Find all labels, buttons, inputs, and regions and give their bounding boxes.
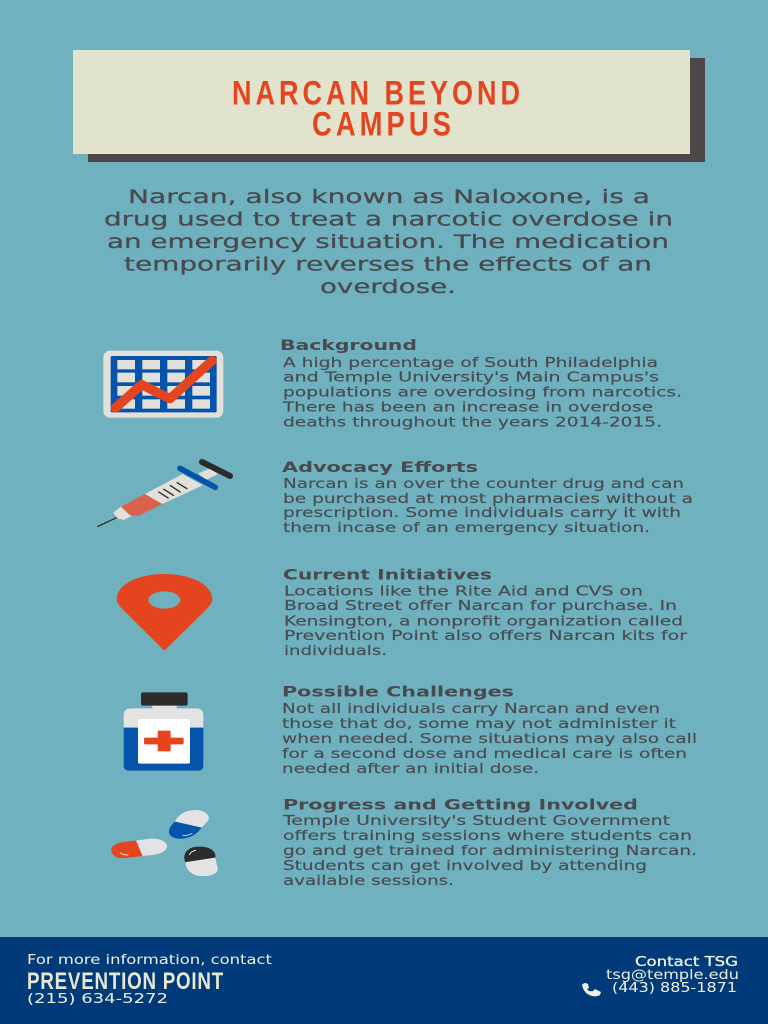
- title banner: [73, 50, 705, 162]
- footer band: [0, 937, 768, 1024]
- section: possible challenges: for a second dose and medical care is often: [282, 747, 687, 762]
- section: current initiatives: Locations like the Rite Aid and CVS on: [284, 584, 643, 600]
- section: advocacy efforts: [282, 460, 693, 536]
- section: possible challenges: those that do, some may not administer it: [282, 717, 676, 732]
- section: background: and Temple University's Main Campus's: [283, 370, 659, 386]
- intro text: temporarily reverses the effects of an: [124, 254, 652, 276]
- icon: syringe: [97, 462, 230, 527]
- title: NARCAN BEYOND: [232, 74, 524, 112]
- section: possible challenges: needed after an initial dose.: [282, 762, 539, 777]
- section: advocacy efforts: prescription. Some individuals carry it with: [283, 506, 681, 521]
- section: background: populations are overdosing from narcotics.: [283, 386, 682, 400]
- section: progress and getting involved: available sessions.: [283, 874, 454, 889]
- section: advocacy efforts: Narcan is an over the counter drug and can: [283, 477, 684, 492]
- icon: line chart: [103, 351, 223, 418]
- section: background: There has been an increase in overdose: [282, 400, 653, 416]
- section: progress and getting involved: go and get trained for administering Narcan.: [283, 844, 697, 859]
- icon: medicine bottle: [124, 692, 203, 771]
- footer: TSG contact: (443) 885-1871: [612, 981, 737, 996]
- intro text: Narcan, also known as Naloxone, is a: [128, 186, 650, 208]
- section: advocacy efforts: Advocacy Efforts: [282, 460, 478, 476]
- footer: TSG contact: tsg@temple.edu: [606, 968, 739, 983]
- section: progress and getting involved: Temple University's Student Government: [282, 814, 670, 829]
- section: current initiatives: Current Initiatives: [283, 568, 492, 584]
- section: background: [280, 338, 682, 430]
- section: background: deaths throughout the years 2014-2015.: [283, 416, 662, 430]
- footer: prevention point contact: For more information, contact: [27, 953, 272, 968]
- section: progress and getting involved: offers training sessions where students can: [283, 829, 692, 844]
- footer: prevention point contact: PREVENTION POINT: [27, 968, 224, 995]
- section: possible challenges: Not all individuals carry Narcan and even: [282, 702, 660, 717]
- section: background: A high percentage of South Philadelphia: [283, 356, 658, 371]
- section: progress and getting involved: [282, 798, 697, 889]
- footer: prevention point contact: [27, 953, 272, 1007]
- footer: TSG contact: Contact TSG: [635, 955, 738, 970]
- title: [232, 74, 524, 144]
- intro text: drug used to treat a narcotic overdose in: [104, 208, 673, 230]
- section: possible challenges: Possible Challenges: [282, 684, 514, 700]
- section: advocacy efforts: them incase of an emergency situation.: [283, 521, 650, 536]
- section: advocacy efforts: be purchased at most pharmacies without a: [283, 492, 693, 507]
- intro text: [104, 186, 673, 298]
- section: progress and getting involved: Students can get involved by attending: [283, 859, 647, 874]
- icon: location pin: [117, 574, 212, 651]
- section: progress and getting involved: Progress and Getting Involved: [283, 798, 638, 814]
- section: current initiatives: Prevention Point also offers Narcan kits for: [284, 629, 688, 644]
- intro text: overdose.: [320, 276, 456, 298]
- title: CAMPUS: [312, 106, 455, 144]
- section: possible challenges: [282, 684, 697, 777]
- section: current initiatives: individuals.: [284, 644, 387, 659]
- section: possible challenges: when needed. Some situations may also call: [282, 732, 697, 747]
- footer: prevention point contact: (215) 634-5272: [27, 992, 168, 1007]
- section: current initiatives: [283, 568, 688, 659]
- icon: phone: [582, 983, 601, 996]
- intro text: an emergency situation. The medication: [107, 231, 669, 253]
- footer: TSG contact: [606, 955, 739, 996]
- section: current initiatives: Kensington, a nonprofit organization called: [284, 614, 683, 630]
- icon: pills: [111, 810, 218, 876]
- section: background: Background: [280, 338, 417, 354]
- section: current initiatives: Broad Street offer Narcan for purchase. In: [284, 599, 677, 614]
